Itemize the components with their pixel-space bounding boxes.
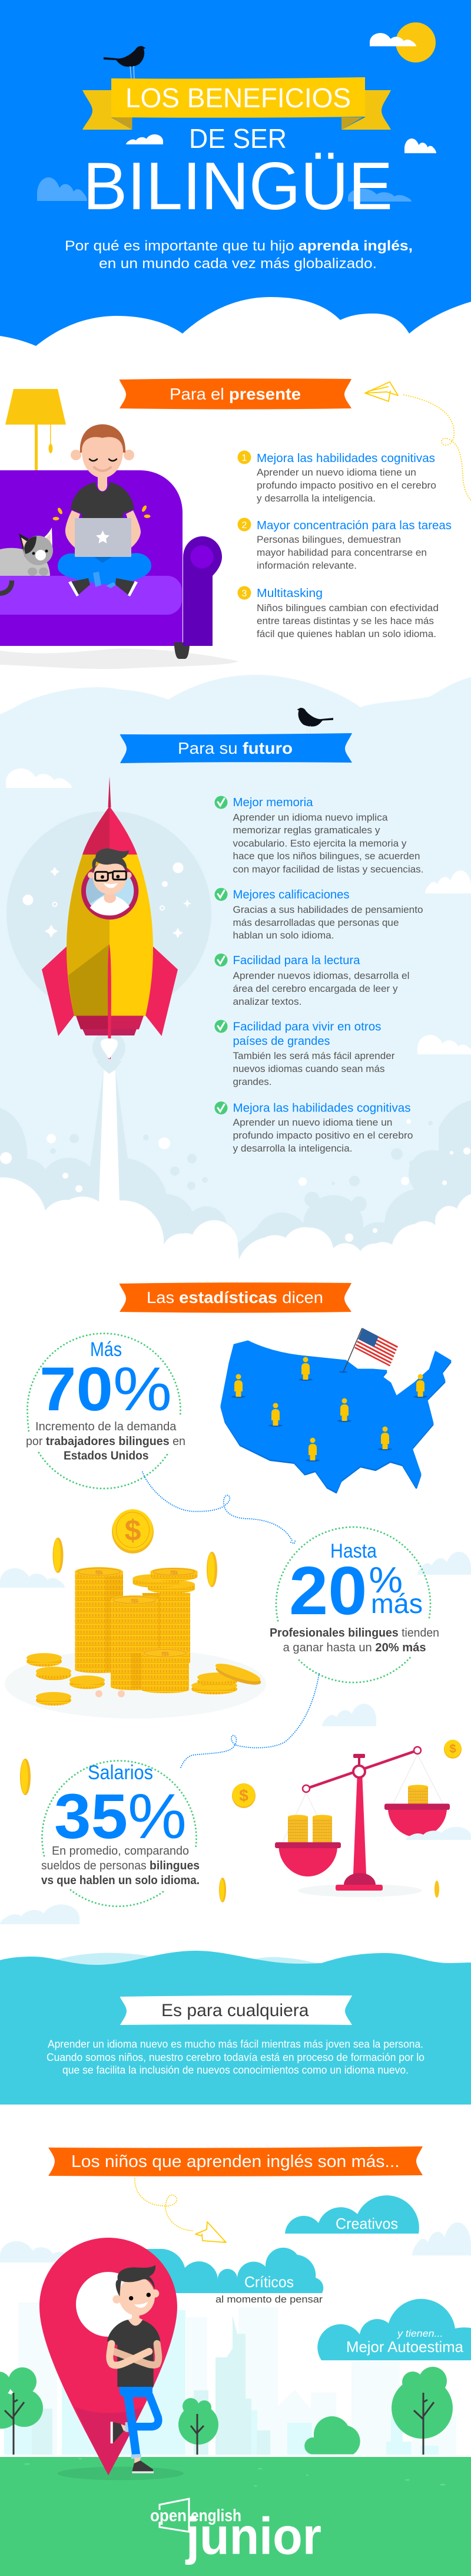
subtitle: [65, 238, 413, 272]
item description: analizar textos.: [233, 996, 301, 1007]
subtitle: en un mundo cada vez más globalizado.: [99, 256, 377, 272]
icon: pale clouds: [0, 1552, 471, 1726]
illustration: purple sofa: [0, 470, 222, 659]
list item: mejor memoria: [214, 796, 424, 875]
stack center: [111, 1595, 158, 1690]
trees: [0, 2367, 453, 2455]
item description: Aprender nuevos idiomas, desarrolla el: [233, 970, 410, 981]
coins on left pan: [288, 1815, 332, 1843]
city skyline: [4, 2303, 456, 2455]
logo text: junior: junior: [185, 2507, 321, 2565]
icon: excitement sparks: [53, 504, 151, 520]
item description: [233, 1117, 413, 1154]
item description: con mayor facilidad de listas y secuencias.: [233, 864, 424, 875]
illustration: boy leaning: [107, 2265, 160, 2473]
icon: black bird on banner: [104, 46, 146, 79]
dotted green ring: [42, 1761, 196, 1907]
cloud: criticos: al momento de pensar: [215, 2294, 323, 2305]
cloud: autoestima: [317, 2299, 471, 2360]
rocket nozzle: [76, 1016, 144, 1035]
scale strings: [283, 1754, 443, 1842]
icon: pale clouds: [412, 2222, 471, 2255]
logo text: open: open: [150, 2506, 187, 2525]
item description: área del cerebro encargada de leer y: [233, 983, 398, 994]
heading: estadisticas: Las estadísticas dicen: [147, 1288, 323, 1307]
logo text: english: english: [191, 2506, 241, 2525]
icon: number 2: [238, 517, 251, 532]
banner: los ninos: [48, 2146, 423, 2176]
item title: Mayor concentración para las tareas: [257, 519, 452, 532]
item description: [233, 904, 423, 941]
icon: green check: [214, 888, 227, 901]
heading: para el presente: Para el presente: [170, 385, 301, 403]
banner: es para cualquiera: [120, 1996, 352, 2025]
item description: [257, 534, 427, 571]
map: united states: [221, 1328, 450, 1492]
paragraph: [47, 2038, 424, 2076]
item description: También les será más fácil aprender: [233, 1050, 395, 1061]
list item 3: [238, 586, 439, 639]
ground specks: [24, 2458, 446, 2486]
loose coins: [26, 1653, 263, 1706]
people markers: [231, 1357, 427, 1462]
item description: profundo impacto positivo en el cerebro: [233, 1130, 413, 1141]
stat description: sueldos de personas bilingues: [41, 1859, 200, 1872]
banner: estadisticas: [119, 1282, 351, 1313]
stat description: En promedio, comparando: [52, 1845, 189, 1858]
label: salarios: Salarios: [88, 1762, 153, 1784]
icon: green check: [214, 796, 227, 809]
cloud: autoestima: y tienen...: [397, 2328, 443, 2339]
item title: Mejora las habilidades cognitivas: [233, 1102, 411, 1115]
rocket window with boy: [81, 849, 138, 919]
icon: green check: [214, 1101, 227, 1114]
bush: [304, 2416, 360, 2454]
dotted flight path: [404, 395, 471, 500]
big falling coin: [112, 1509, 154, 1553]
list item: vivir en otros paises: [214, 1020, 395, 1087]
coin stack feet: [95, 1690, 125, 1697]
thin coins: [53, 1538, 217, 1587]
item title: Mejores calificaciones: [233, 889, 350, 902]
map shape: [221, 1341, 450, 1492]
illustration: floor shadow: [0, 649, 238, 669]
item description: profundo impacto positivo en el cerebro: [257, 480, 436, 491]
illustration: launch smoke clouds back: [0, 1100, 471, 1267]
dotted flight path: [135, 2179, 194, 2231]
panel: pale blue future background: [0, 675, 471, 1273]
big falling coin: $: [125, 1514, 141, 1547]
stat description: [41, 1845, 200, 1887]
stat circle: 70 percent: [26, 1334, 185, 1489]
stat description: Profesionales bilingues tienden: [270, 1627, 439, 1640]
percent sign: %: [369, 1560, 403, 1601]
illustration: balance scale: [275, 1747, 450, 1897]
paragraph: Cuando somos niños, nuestro cerebro todavía está en proceso de formación por lo: [47, 2051, 424, 2063]
item description: Aprender un nuevo idioma tiene un: [233, 1117, 392, 1128]
title: los beneficios: LOS BENEFICIOS: [125, 83, 351, 113]
item description: [233, 812, 424, 875]
item description: y desarrolla la inteligencia.: [233, 1143, 352, 1154]
panel: para su futuro: [0, 708, 471, 1279]
dotted arrow to salarios: [180, 1674, 319, 1769]
heading: es para cualquiera: Es para cualquiera: [161, 2001, 309, 2020]
icon: pale cloud right: [348, 189, 412, 202]
heading: los ninos: Los niños que aprenden inglés son más...: [71, 2152, 400, 2171]
icon: white cloud over sun: [370, 33, 416, 46]
number: 35 percent: 35%: [54, 1780, 187, 1852]
rocket fins: [42, 946, 178, 1036]
item title: Multitasking: [257, 587, 323, 600]
item description: [257, 602, 439, 639]
flag: [339, 1328, 398, 1373]
light wave behind: [57, 1953, 319, 1968]
stack tall left: [75, 1567, 123, 1673]
item title: [233, 1020, 382, 1048]
decorative coins near scale: $: [449, 1743, 456, 1756]
item description: y desarrolla la inteligencia.: [257, 493, 376, 504]
rocket center fin: [108, 944, 111, 1059]
stat description: por trabajadores bilingues en: [26, 1435, 185, 1448]
icon: sun: [396, 22, 436, 62]
panel: los ninos son mas: [0, 2146, 471, 2576]
item description: Gracias a sus habilidades de pensamiento: [233, 904, 423, 915]
rocket flame: [101, 1038, 118, 1059]
rocket body: [67, 855, 153, 1016]
list item 1: [238, 450, 436, 504]
icon: number 3: [238, 586, 251, 600]
coins on right pan: [408, 1785, 428, 1804]
dotted arrow to hasta: [142, 1472, 296, 1543]
label: mas: Más: [90, 1338, 122, 1361]
item description: [233, 970, 410, 1007]
cloud: autoestima: Mejor Autoestima: [346, 2338, 464, 2356]
item description: Niños bilingues cambian con efectividad: [257, 602, 439, 614]
item description: [233, 1050, 395, 1087]
item description: hablan un solo idioma.: [233, 930, 334, 941]
list item 3: 3: [242, 589, 247, 599]
panel: para el presente: [0, 378, 471, 669]
illustration: gray cat: [0, 527, 53, 596]
item description: Personas bilingues, demuestran: [257, 534, 401, 545]
item title: Mejora las habilidades cognitivas: [257, 452, 435, 465]
list item: mejores calificaciones: [214, 888, 423, 941]
stat description: a ganar hasta un 20% más: [283, 1641, 426, 1654]
stat circle: 35 percent: [41, 1761, 200, 1907]
illustration: man with laptop: [58, 424, 151, 596]
item description: grandes.: [233, 1076, 272, 1087]
item description: vocabulario. Esto ejercita la memoria y: [233, 838, 407, 849]
dotted green ring: [276, 1527, 430, 1683]
stack tall left: $: [95, 1569, 104, 1575]
left pan: [275, 1842, 341, 1876]
title: bilingue: BILINGÜE: [83, 149, 393, 224]
icon: paper plane: [195, 2222, 226, 2242]
number: 20: 20: [289, 1552, 367, 1629]
item description: [257, 467, 436, 504]
subtitle: Por qué es importante que tu hijo aprenda inglés,: [65, 238, 413, 254]
paragraph: Aprender un idioma nuevo es mucho más fácil mientras más joven sea la persona.: [48, 2038, 423, 2050]
icon: number 1: [238, 450, 251, 464]
teal background: [0, 1951, 471, 2105]
icon: pale cloud left: [0, 2241, 72, 2262]
icon: green check: [214, 1020, 227, 1033]
hero blue sky with cloud edge: [0, 0, 471, 346]
item description: memorizar reglas gramaticales y: [233, 824, 380, 836]
item description: más desarrolladas que personas que: [233, 917, 399, 928]
scale stand: [336, 1754, 383, 1891]
icon: black bird on banner: [297, 708, 333, 737]
logo: open english junior: [150, 2499, 321, 2565]
banner: para su futuro: [120, 733, 352, 763]
label: hasta: Hasta: [330, 1540, 377, 1562]
item title: Mejor memoria: [233, 796, 313, 809]
heading: para su futuro: Para su futuro: [178, 739, 293, 757]
illustration: launch smoke clouds front: [0, 1177, 471, 1279]
rocket backdrop circle: [6, 811, 211, 1016]
illustration: map pin: [39, 2238, 177, 2475]
item description: hace que los niños bilingues, se acuerden: [233, 850, 420, 862]
item description: nuevos idiomas cuando sean más: [233, 1063, 385, 1074]
stack back right: [133, 1568, 198, 1666]
stat description: [270, 1627, 439, 1654]
panel: las estadisticas dicen: [0, 1282, 471, 1924]
logo frame: [160, 2499, 189, 2532]
space decorations: [22, 863, 191, 938]
title: de ser: DE SER: [189, 123, 287, 154]
item description: fácil que quienes hablan un solo idioma.: [257, 628, 436, 639]
list item: mejora habilidades: [214, 1101, 413, 1154]
banner: title ribbon: [82, 77, 391, 130]
stat description: Estados Unidos: [64, 1450, 148, 1463]
scale beam: [303, 1747, 421, 1792]
label: mas: más: [371, 1588, 423, 1619]
paragraph: que se facilita la inclusión de nuevos conocimientos como un idioma nuevo.: [62, 2064, 409, 2076]
illustration: floor lamp: [5, 389, 66, 471]
illustration: coin stacks: [5, 1509, 266, 1719]
icon: paper plane: [365, 382, 398, 401]
panel: es para cualquiera: [0, 1951, 471, 2105]
list item 2: 2: [242, 520, 247, 530]
stack front: [141, 1648, 189, 1693]
icon: small cloud right: [404, 138, 436, 153]
decorative coins near scale: [20, 1740, 462, 1902]
stack front: $: [161, 1651, 170, 1657]
list item 1: 1: [242, 453, 247, 463]
list item: facilidad para la lectura: [214, 954, 410, 1007]
stat description: Incremento de la demanda: [35, 1420, 177, 1433]
pin shadow: [58, 2467, 184, 2480]
decorative coins near scale: $: [239, 1786, 248, 1805]
item description: mayor habilidad para concentrarse en: [257, 547, 427, 558]
item description: Aprender un nuevo idioma tiene un: [257, 467, 416, 478]
stack center: $: [130, 1598, 139, 1604]
icon: green check: [214, 954, 227, 967]
cloud: creativos: [285, 2195, 419, 2234]
stat description: vs que hablen un solo idioma.: [41, 1874, 200, 1887]
list item 2: [238, 517, 452, 571]
rocket exhaust glow: [92, 1031, 125, 1064]
icon: pale cloud left: [37, 177, 87, 201]
item description: información relevante.: [257, 560, 357, 571]
item title: Facilidad para vivir en otros: [233, 1020, 382, 1033]
illustration: smoke trail: [90, 1061, 128, 1202]
icon: small cloud left: [126, 134, 163, 144]
item title: Facilidad para la lectura: [233, 954, 360, 967]
illustration: rocket launch: [6, 776, 211, 1064]
stat description: [26, 1420, 185, 1463]
item title: países de grandes: [233, 1035, 330, 1048]
cloud: creativos: Creativos: [336, 2215, 398, 2232]
right pan: [384, 1803, 450, 1838]
item description: Aprender un idioma nuevo implica: [233, 812, 388, 823]
dotted green ring: [27, 1334, 180, 1489]
icon: pale clouds near scale: [0, 1827, 471, 1924]
ground: [0, 2457, 471, 2576]
icon: white clouds: [6, 768, 471, 1054]
coin floor shadow: [5, 1649, 266, 1719]
scale shadow: [298, 1884, 422, 1897]
stack back right: $: [170, 1569, 178, 1575]
item description: entre tareas distintas y se les hace más: [257, 615, 434, 626]
banner: para el presente: [119, 378, 351, 409]
cloud: criticos: Críticos: [244, 2273, 294, 2291]
panel: hero header: [0, 0, 471, 346]
number: 70 percent: 70%: [39, 1355, 172, 1424]
smoke bubbles: [0, 1119, 470, 1242]
rocket nose cone: [82, 776, 137, 855]
stat circle: 20 percent: [270, 1527, 439, 1683]
cloud: criticos: [141, 2248, 323, 2305]
